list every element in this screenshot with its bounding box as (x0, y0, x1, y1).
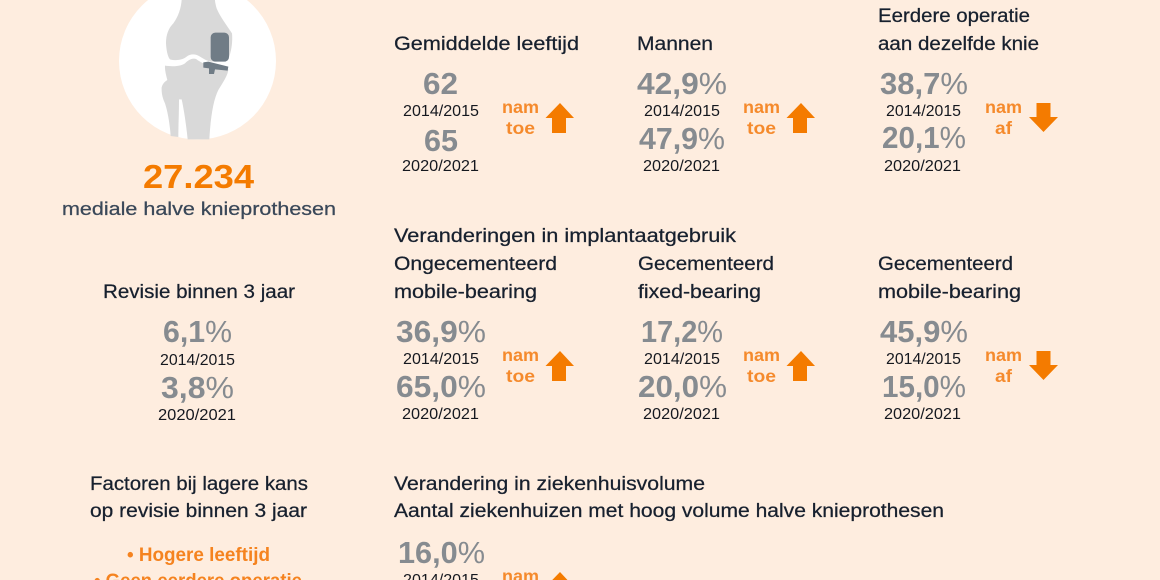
panel: gecementeerd fixed-bearing: 20,0% (638, 369, 727, 404)
panel: revisie binnen 3 jaar: 6,1% (163, 314, 232, 349)
panel: revisie binnen 3 jaar (103, 282, 296, 424)
panel: verandering in ziekenhuisvolume: Aantal ziekenhuizen met hoog volume halve knieprothesen (394, 501, 944, 522)
panel: mannen: Mannen (637, 34, 713, 55)
panel: gemiddelde leeftijd: 2014/2015 (403, 103, 479, 120)
panel: gecementeerd fixed-bearing: Gecementeerd (638, 254, 774, 275)
panel: ongecementeerd mobile-bearing: toe (506, 366, 535, 386)
panel: gecementeerd mobile-bearing: 45,9% (880, 314, 968, 349)
panel: eerdere operatie: af (995, 118, 1012, 138)
panel: revisie binnen 3 jaar: Revisie binnen 3 jaar (103, 282, 296, 303)
panel: ongecementeerd mobile-bearing: mobile-bearing (394, 282, 537, 303)
panel: ongecementeerd mobile-bearing: nam (502, 345, 539, 365)
panel: ongecementeerd mobile-bearing: 36,9% (396, 314, 486, 349)
panel: revisie binnen 3 jaar: 2020/2021 (158, 407, 236, 424)
panel: verandering in ziekenhuisvolume: 16,0% (398, 535, 485, 570)
panel: gecementeerd fixed-bearing: 2014/2015 (644, 351, 720, 368)
panel: eerdere operatie: Eerdere operatie (878, 6, 1030, 27)
panel: gecementeerd mobile-bearing: 2014/2015 (886, 351, 961, 368)
panel: eerdere operatie: 20,1% (882, 120, 966, 155)
panel: verandering in ziekenhuisvolume (394, 474, 944, 580)
panel: gecementeerd fixed-bearing: fixed-bearing (638, 282, 761, 303)
panel: factoren lagere kans op revisie: • Hogere leeftijd (127, 545, 270, 566)
panel: gecementeerd mobile-bearing: nam (985, 345, 1022, 365)
panel: mannen: toe (747, 118, 776, 138)
panel: revisie binnen 3 jaar: 3,8% (161, 370, 234, 405)
panel: gecementeerd fixed-bearing (638, 254, 815, 423)
panel: eerdere operatie: aan dezelfde knie (878, 34, 1039, 55)
panel: ongecementeerd mobile-bearing: 2020/2021 (402, 406, 479, 423)
panel: mannen: 42,9% (637, 66, 727, 101)
panel: gecementeerd mobile-bearing (878, 254, 1058, 423)
panel: gecementeerd mobile-bearing: 2020/2021 (884, 406, 961, 423)
panel: gemiddelde leeftijd: 2020/2021 (402, 158, 479, 175)
icon: knee with implant (119, 0, 276, 140)
panel: gecementeerd mobile-bearing: Gecementeerd (878, 254, 1013, 275)
panel: ongecementeerd mobile-bearing: 65,0% (396, 369, 486, 404)
total count: 27.234 (143, 158, 255, 195)
panel: gemiddelde leeftijd: 65 (424, 123, 458, 158)
panel: gemiddelde leeftijd: 62 (423, 66, 458, 101)
panel: factoren lagere kans op revisie (90, 474, 308, 580)
heading: veranderingen in implantaatgebruik: Veranderingen in implantaatgebruik (394, 226, 737, 247)
panel: eerdere operatie (878, 6, 1058, 175)
panel: gecementeerd mobile-bearing: mobile-bearing (878, 282, 1021, 303)
panel: ongecementeerd mobile-bearing: Ongecementeerd (394, 254, 557, 275)
panel: eerdere operatie: 38,7% (880, 66, 968, 101)
panel: revisie binnen 3 jaar: 2014/2015 (160, 352, 235, 369)
panel: gemiddelde leeftijd: nam (502, 97, 539, 117)
panel: gemiddelde leeftijd (394, 34, 579, 175)
panel: eerdere operatie: nam (985, 97, 1022, 117)
panel: factoren lagere kans op revisie: op revisie binnen 3 jaar (90, 501, 308, 522)
panel: gemiddelde leeftijd: toe (506, 118, 535, 138)
panel: mannen: 2014/2015 (644, 103, 720, 120)
panel: gecementeerd fixed-bearing: 2020/2021 (643, 406, 720, 423)
panel: ongecementeerd mobile-bearing (394, 254, 574, 423)
panel: verandering in ziekenhuisvolume: Verandering in ziekenhuisvolume (394, 474, 705, 495)
panel: mannen (637, 34, 815, 175)
panel: gecementeerd fixed-bearing: toe (747, 366, 776, 386)
panel: mannen: nam (743, 97, 780, 117)
panel: gecementeerd fixed-bearing: 17,2% (641, 314, 723, 349)
panel: eerdere operatie: 2014/2015 (886, 103, 961, 120)
panel: gecementeerd mobile-bearing: 15,0% (882, 369, 966, 404)
panel: gecementeerd mobile-bearing: af (995, 366, 1012, 386)
panel: ongecementeerd mobile-bearing: 2014/2015 (403, 351, 479, 368)
panel: factoren lagere kans op revisie: Factoren bij lagere kans (90, 474, 308, 495)
panel: gemiddelde leeftijd: Gemiddelde leeftijd (394, 34, 579, 55)
panel: mannen: 47,9% (639, 121, 725, 156)
panel: gecementeerd fixed-bearing: nam (743, 345, 780, 365)
panel: eerdere operatie: 2020/2021 (884, 158, 961, 175)
panel: mannen: 2020/2021 (643, 158, 720, 175)
total caption: mediale halve knieprothesen (62, 198, 336, 219)
